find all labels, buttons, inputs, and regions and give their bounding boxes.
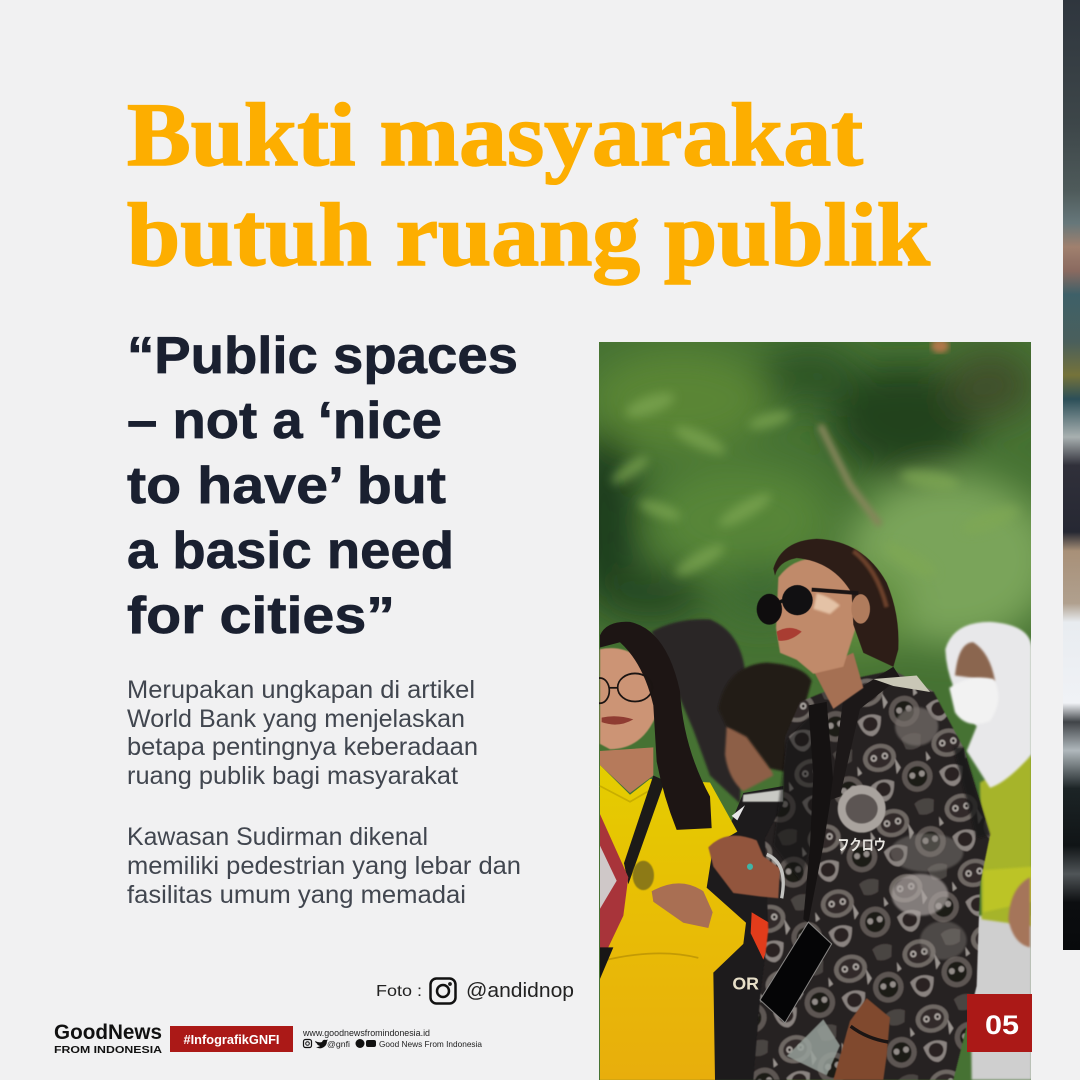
girl in yellow hoodie with glasses — [591, 622, 746, 1080]
website and social handles: www.goodnewsfromindonesia.id — [302, 1028, 430, 1038]
quote heading: to have’ but — [127, 457, 446, 515]
bystander in black hijab — [652, 619, 745, 804]
hand — [708, 836, 780, 898]
sunglasses — [757, 594, 782, 625]
body paragraph 1: World Bank yang menjelaskan — [127, 705, 465, 733]
quote heading: – not a ‘nice — [127, 392, 442, 450]
photo credit: @andidnop — [466, 980, 574, 1002]
hair and face — [813, 653, 863, 709]
icon: instagram — [430, 978, 456, 1004]
title — [127, 86, 930, 285]
website and social handles: Good News From Indonesia — [379, 1039, 482, 1049]
GoodNews From Indonesia logo: GoodNews — [54, 1021, 162, 1044]
title: Bukti masyarakat — [127, 86, 863, 185]
photo credit — [376, 978, 574, 1004]
quote heading: a basic need — [127, 522, 454, 580]
quote heading: for cities” — [127, 587, 395, 645]
icon: social icons — [304, 1039, 376, 1048]
hashtag badge: #InfografikGNFI — [184, 1032, 280, 1047]
website and social handles: @gnfi — [327, 1039, 350, 1049]
body paragraph 1 — [127, 676, 478, 790]
hashtag badge — [170, 1026, 293, 1052]
page number badge — [967, 994, 1032, 1052]
main subject: woman in owl-print jacket: フクロウ — [837, 833, 886, 855]
title: butuh ruang publik — [127, 186, 930, 285]
main subject: woman in owl-print jacket — [708, 539, 990, 1080]
GoodNews From Indonesia logo: FROM INDONESIA — [54, 1044, 162, 1056]
bystander boy in black shirt — [700, 663, 812, 1080]
body paragraph 1: ruang publik bagi masyarakat — [127, 762, 458, 790]
quote heading — [127, 327, 518, 645]
next slide photo strip — [1063, 0, 1080, 950]
foliage — [599, 342, 1031, 662]
photo: people on Sudirman pedestrian area — [599, 342, 1031, 1080]
phone — [760, 922, 832, 1023]
body paragraph 1: betapa pentingnya keberadaan — [127, 733, 478, 761]
photo credit: Foto : — [376, 983, 422, 1000]
plastic bag and forearm — [787, 1019, 840, 1075]
body paragraph 2: Kawasan Sudirman dikenal — [127, 823, 428, 851]
bystander boy in black shirt: OR — [732, 974, 759, 994]
page number badge: 05 — [985, 1010, 1019, 1040]
GoodNews From Indonesia logo — [54, 1021, 162, 1056]
body paragraph 2: fasilitas umum yang memadai — [127, 881, 466, 909]
body paragraph 1: Merupakan ungkapan di artikel — [127, 676, 475, 704]
body paragraph 2 — [127, 823, 521, 909]
quote heading: “Public spaces — [127, 327, 518, 385]
bystander in white hijab and green shirt — [945, 622, 1032, 1080]
body paragraph 2: memiliki pedestrian yang lebar dan — [127, 852, 521, 880]
website and social handles — [302, 1028, 482, 1049]
